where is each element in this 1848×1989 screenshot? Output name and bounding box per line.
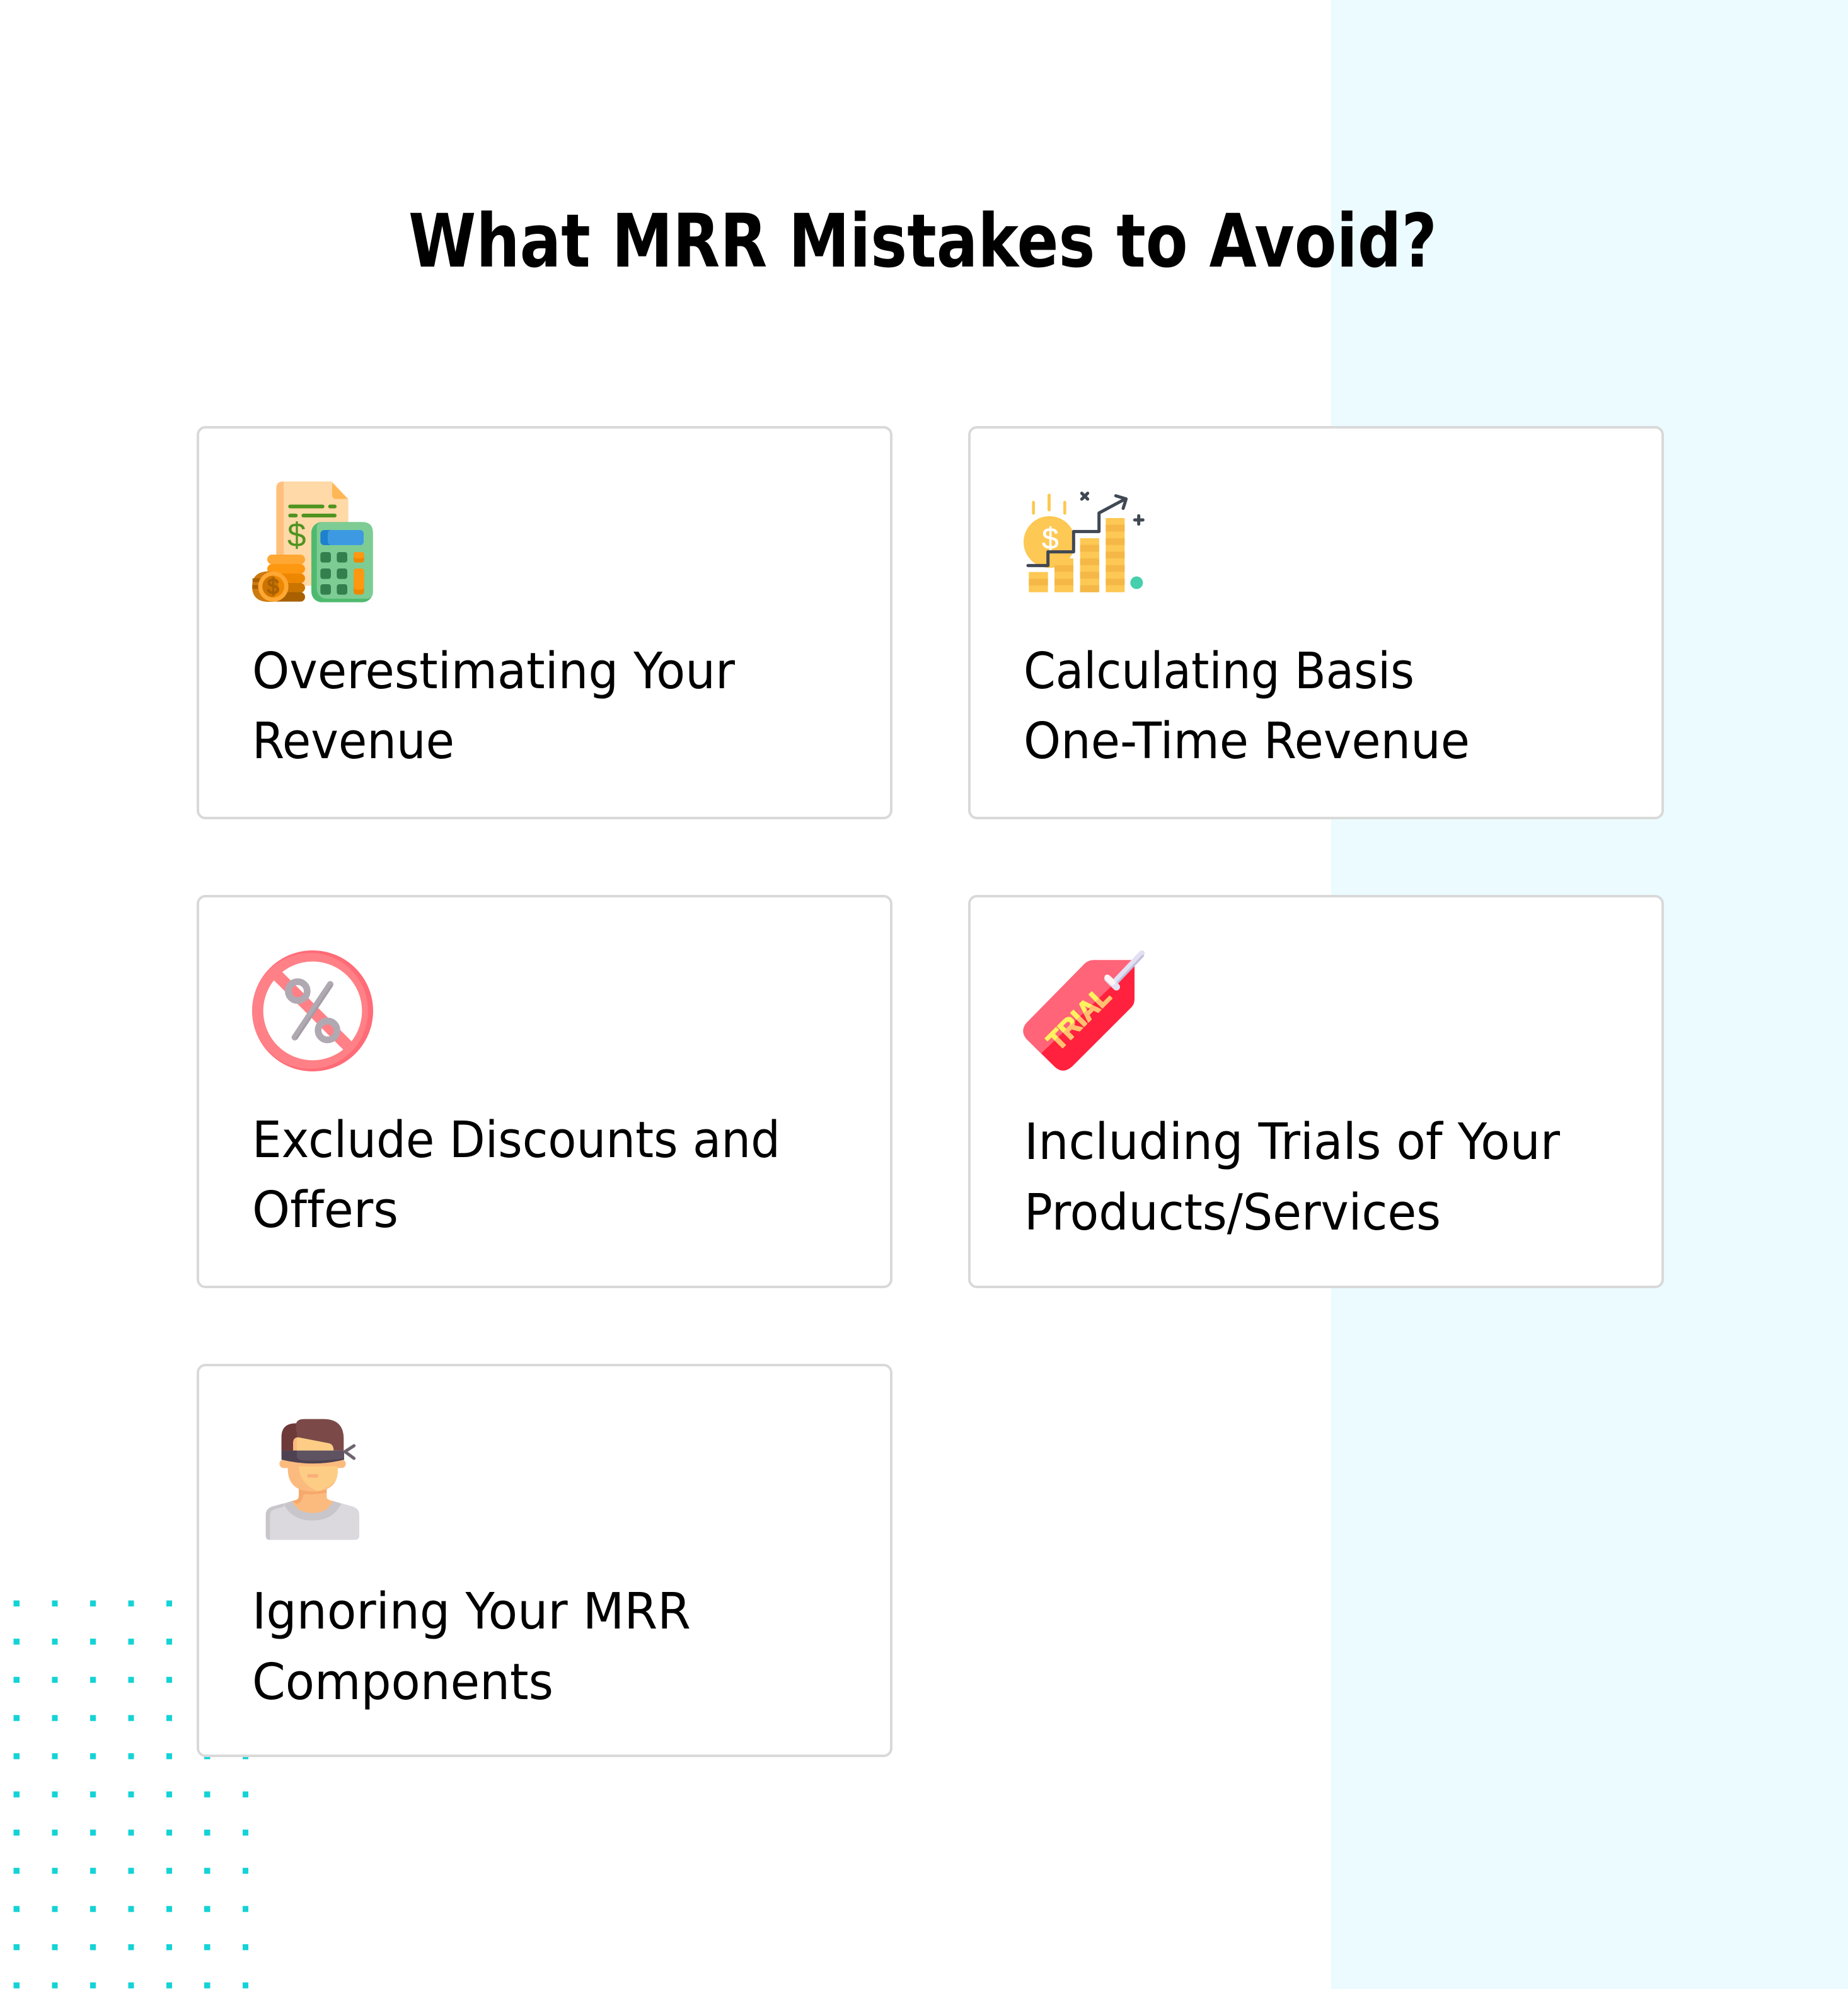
heading: exclude discounts and offers: Offers [252, 1181, 398, 1239]
panel: ignoring your mrr components [198, 1365, 891, 1756]
heading: including trials of your products/services: Products/Services [1024, 1184, 1441, 1242]
heading: calculating basis one-time revenue: Calculating Basis [1024, 642, 1414, 700]
icon: blindfolded person [266, 1419, 359, 1540]
heading: including trials of your products/services [1024, 1113, 1560, 1242]
icon: invoice, calculator and coins: $ [267, 575, 279, 599]
icon: invoice, calculator and coins [252, 481, 373, 602]
heading: ignoring your mrr components [252, 1583, 691, 1711]
heading: exclude discounts and offers: Exclude Discounts and [252, 1111, 780, 1169]
icon: trial price tag: TRIAL [1041, 981, 1117, 1056]
heading: overestimating your revenue: Overestimating Your [252, 642, 735, 700]
icon: trial price tag: TRIAL [1041, 981, 1117, 1056]
icon: trial price tag [1023, 954, 1143, 1071]
icon: rising coin stacks chart [1024, 493, 1143, 592]
panel: exclude discounts and offers [198, 896, 891, 1287]
icon: rising coin stacks chart: $ [1042, 522, 1059, 555]
heading: exclude discounts and offers [252, 1111, 780, 1239]
heading: calculating basis one-time revenue [1024, 642, 1470, 770]
panel: calculating basis one-time revenue [969, 427, 1663, 818]
panel: including trials of your products/services [969, 896, 1663, 1287]
heading: calculating basis one-time revenue: One-Time Revenue [1024, 712, 1470, 770]
heading: ignoring your mrr components: Components [252, 1653, 553, 1711]
heading: ignoring your mrr components: Ignoring Your MRR [252, 1583, 691, 1640]
icon: crossed-out percent sign [252, 950, 373, 1071]
title: What MRR Mistakes to Avoid? [408, 198, 1437, 284]
heading: overestimating your revenue: Revenue [252, 712, 454, 770]
icon: invoice, calculator and coins: $ [287, 517, 306, 554]
background panel: pale blue right band [1331, 0, 1848, 1989]
heading: including trials of your products/services: Including Trials of Your [1024, 1113, 1560, 1171]
panel: overestimating your revenue [198, 427, 891, 818]
decorative dot grid [0, 1594, 265, 1989]
heading: overestimating your revenue [252, 642, 735, 770]
